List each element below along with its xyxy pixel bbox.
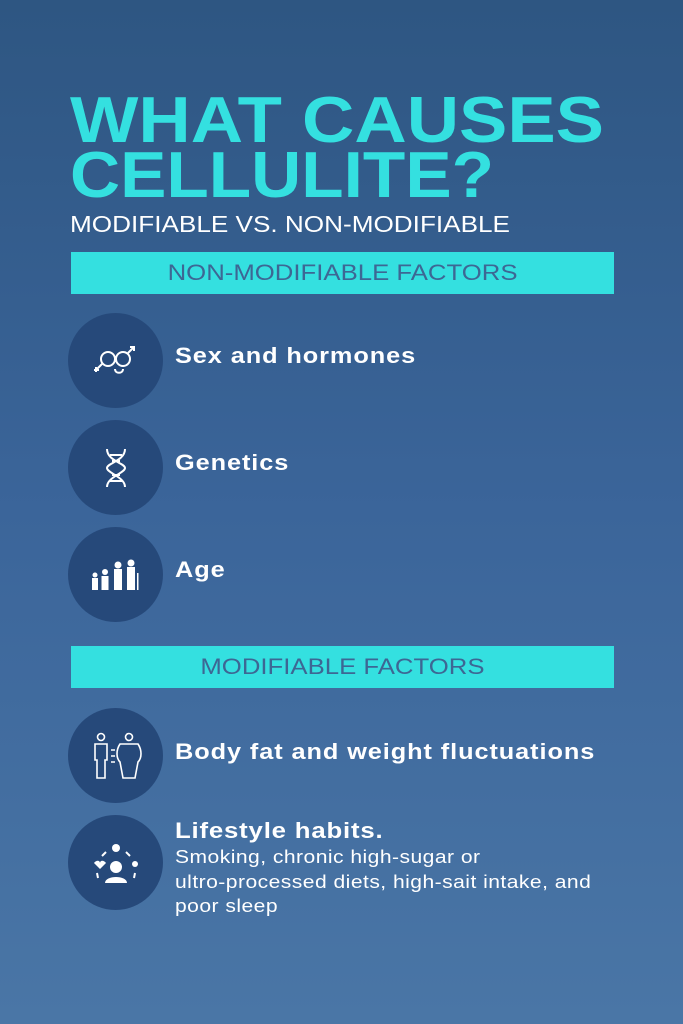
title: CELLULITE? xyxy=(70,138,494,211)
icon: dna xyxy=(68,420,163,515)
icon: sex symbols xyxy=(68,313,163,408)
band: non-modifiable factors: NON-MODIFIABLE FACTORS xyxy=(168,260,517,285)
band: modifiable factors xyxy=(71,646,614,688)
text: lifestyle habits: Lifestyle habits. xyxy=(175,818,383,843)
icon: lifestyle xyxy=(68,815,163,910)
icon: family ages xyxy=(68,527,163,622)
band: modifiable factors: MODIFIABLE FACTORS xyxy=(200,654,485,679)
title: MODIFIABLE VS. NON-MODIFIABLE xyxy=(70,211,510,237)
text: lifestyle habits: Smoking, chronic high-sugar or xyxy=(175,847,481,867)
label: sex and hormones: Sex and hormones xyxy=(175,343,416,368)
text: lifestyle habits: ultro-processed diets, high-sait intake, and xyxy=(175,872,591,892)
label: body fat: Body fat and weight fluctuations xyxy=(175,739,595,764)
title: WHAT CAUSES xyxy=(70,83,604,156)
text: lifestyle habits: poor sleep xyxy=(175,896,278,916)
title xyxy=(70,83,604,237)
icon: body weight xyxy=(68,708,163,803)
label: age: Age xyxy=(175,557,226,582)
label: genetics: Genetics xyxy=(175,450,289,475)
text: lifestyle habits xyxy=(175,818,591,916)
band: non-modifiable factors xyxy=(71,252,614,294)
